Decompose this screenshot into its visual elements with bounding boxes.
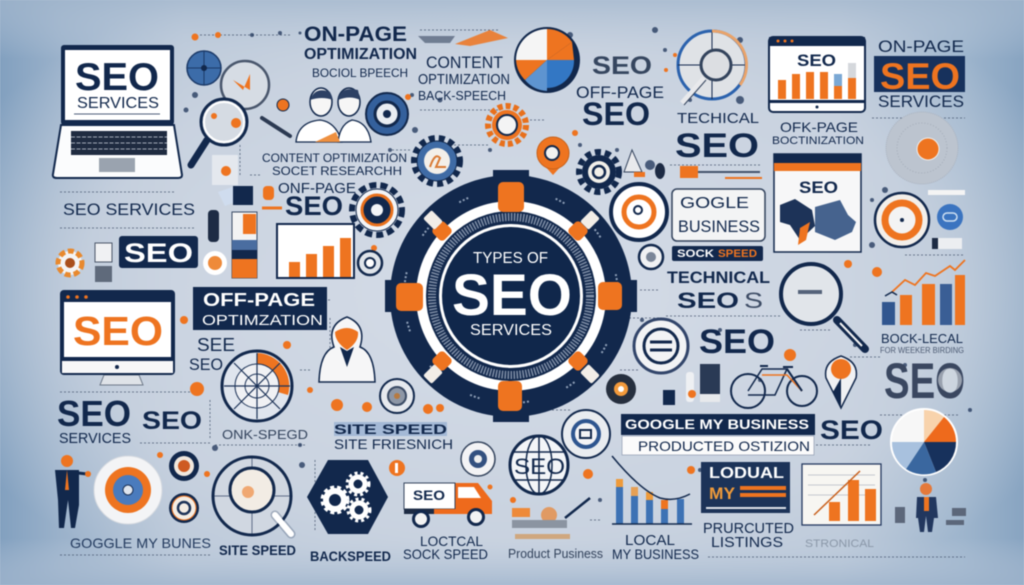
text: site speed [334,421,453,452]
chart: pie lower right [891,409,957,475]
heading: technical SEO S: TECHNICAL [667,268,770,287]
label: distorted SEO: SEO [884,353,965,409]
icon: business man right [916,483,938,532]
icon: SEO delivery truck: SEO [413,487,445,503]
chart: declining bars [612,456,692,524]
icon: dark orange ring [606,374,636,404]
captions lower left: SOCK SPEED [403,546,488,562]
heading: off-page SEO: SEO [592,52,652,80]
captions lower right [508,520,874,562]
icon: mesh circle [886,112,958,184]
text: off-page optimization: BOCTINIZATION [772,135,864,147]
laptop: SEO services [53,45,182,178]
captions lower right: Product Pusiness [508,546,603,561]
icon: tube [232,212,257,278]
central hub: types of SEO services [385,170,637,422]
heading: technical SEO: SEO [675,127,759,165]
captions lower right: MY BUSINESS [612,546,699,562]
icon: speed magnifier [213,457,291,535]
icon: wrench [262,118,290,136]
icon: big magnifier [781,264,865,349]
heading: technical SEO S [667,268,770,313]
icon: target pie [222,351,292,421]
label: SEO dark [119,236,198,268]
icon: globe SEO: SEO [514,454,565,479]
icon: small ring [358,251,382,275]
captions lower left: GOGGLE MY BUNES [70,535,211,551]
label: sock speed: SOCK [677,248,714,260]
text: content optimization, social research: SOCET RESEARCHH [272,164,402,178]
heading: on-page SEO: ONF-PAGE [278,180,356,197]
icon: bicycle [731,366,817,408]
icon: two people [296,88,371,142]
icon: small dark rect [663,390,675,405]
label: off-page optimization box [193,287,327,330]
captions lower left [70,533,488,564]
heading: on-page SEO [278,180,356,221]
laptop: SEO services: SEO [75,56,159,99]
heading: content optimization [418,53,510,103]
icon: large target [94,456,162,524]
text: site speed: SITE FRIESNICH [334,436,453,452]
heading: technical SEO: TECHICAL [677,110,759,127]
heading: technical SEO [675,110,759,165]
icon: small lens [639,245,663,269]
label: sock speed: SPEED [718,248,757,260]
icon: small orange gear [58,251,82,275]
heading: on-page SEO services: SERVICES [878,92,964,111]
heading: off-page SEO: OFF-PAGE [576,83,664,102]
icon: penguin figure [624,150,645,177]
hub label: TYPES OF [473,250,548,267]
icon: envelope and box [218,185,253,206]
icon: SEO delivery truck [404,483,492,526]
heading: content optimization: BACK-SPEECH [418,88,506,103]
chart: orange growth card [802,464,881,525]
text: see SEO [189,335,235,374]
heading: on-page optimization [304,23,417,80]
icon: orange pin [262,186,282,208]
icon: two small rings [169,451,199,523]
label: sock speed [672,246,763,261]
text: content optimization, social research [262,151,407,178]
heading: on-page SEO: SEO [285,191,343,221]
icon: device with pin [686,364,720,402]
hub label: SERVICES [470,322,552,339]
text: see SEO: SEE [197,335,235,355]
text: off-page optimization: OFK-PAGE [780,119,858,135]
icon: ring E [634,319,688,373]
label: off-page optimization box: OPTIMZATION [202,312,323,329]
captions lower right: PRURCUTED [703,520,794,537]
text: see SEO: SEO [189,355,223,374]
icon: blue badge [937,204,963,230]
chart: trend line with bars [882,260,965,325]
captions lower left: BACKSPEED [310,548,391,564]
icon: tool lamp [512,498,590,539]
heading: content optimization: OPTIMIZATION [418,71,510,88]
hub label: SEO [452,263,572,328]
icon: orange target ring [611,184,667,240]
heading: on-page optimization: OPTIMIZATION [304,46,417,63]
icon: white strip [928,190,965,195]
label: off-page optimization box: OFF-PAGE [203,290,315,310]
icon: orange dot [277,99,289,111]
icon: blue gear [414,138,460,184]
icon: browser with bars [769,37,865,112]
heading: technical SEO S: S [744,288,763,313]
text: site speed: SITE SPEED [334,421,447,437]
captions lower right: LOCAL [625,532,675,549]
icon: google my business banner [621,414,815,455]
heading: on-page SEO services: ON-PAGE [878,37,964,56]
icon: pin ring [461,442,495,476]
icon: orange wedge [418,30,508,46]
hub orange tabs [396,182,622,411]
icon: magnifier target [678,31,747,105]
icon: back magnifier [221,61,269,109]
icon: small lens dial [380,379,414,413]
heading: SEO lower right: SEO [820,415,883,445]
icon: orange pin marker [537,137,569,175]
icon: globe SEO [510,436,568,494]
icon: orange ring gear [352,185,402,235]
icon: orange ring [875,193,929,247]
heading: local text: FOR WEEKER BIRDING [880,346,964,355]
card: local my: MY [709,484,736,503]
icon: orange button [389,460,405,476]
text: content optimization, social research: CONTENT OPTIMIZATION [262,151,407,165]
card: local my [701,462,790,513]
icon: side tools [895,507,966,525]
text: SEO services: SEO SERVICES [63,200,195,219]
icon: blue ring [366,93,408,135]
heading: SEO services lower left [57,393,202,447]
heading: on-page optimization: ON-PAGE [304,23,407,46]
card: browser with puzzle map: SEO [799,178,838,197]
heading: local text: BOCK-LECAL [881,331,963,346]
icon: location pin [826,356,856,408]
icon: pie chart top [514,27,580,93]
heading: on-page SEO services [874,37,965,111]
captions lower left: SITE SPEED [219,542,296,558]
icon: dark pill [208,210,219,242]
icon: cable connector [655,163,762,179]
icon: orange gear [488,106,526,144]
heading: SEO mid right: SEO [699,323,775,361]
icon: business man left [55,455,91,528]
heading: SEO services lower left: SEO [57,393,131,434]
captions lower right: LISTINGS [711,534,783,551]
icon: desktop monitor [60,290,175,385]
laptop: SEO services: SERVICES [77,95,159,112]
text: off-page optimization [772,119,864,147]
heading: SEO services lower left: SERVICES [59,430,131,447]
icon: desktop monitor: SEO [73,308,163,354]
heading: off-page SEO: SEO [582,96,650,132]
captions lower right: STRONICAL [805,538,874,550]
icon: hooded person [319,317,375,382]
card: local my: LODUAL [709,465,784,482]
card: Google Business: GOGLE [680,195,749,212]
icon: browser with bars: SEO [797,51,836,70]
icon: hexagon gears [307,460,388,534]
icon: google my business banner: PRODUCTED OSTIZION [638,438,810,454]
heading: on-page SEO services: SEO [880,56,960,97]
card: browser with puzzle map [774,154,861,252]
heading: off-page SEO [576,52,664,132]
text: onk-speed: ONK-SPEGD [222,427,308,442]
label: SEO dark: SEO [124,238,193,268]
heading: on-page optimization: BOCIOL BPEECH [312,66,408,80]
heading: content optimization: CONTENT [426,53,503,72]
icon: google my business banner: GOOGLE MY BUSINESS [625,416,809,432]
captions lower left: LOCTCAL [420,533,483,549]
icon: orange plate [203,251,227,275]
icon: device [95,243,112,282]
chart: orange growth bars [277,224,354,278]
icon: document [212,155,238,185]
icon: ring C [562,410,610,458]
card: Google Business: BUSINESS [678,217,760,236]
icon: front magnifier [191,99,247,165]
heading: SEO services lower left: SEO [142,407,202,435]
heading: local text [880,331,964,355]
card: Google Business [672,189,765,241]
icon: blue compass [187,51,221,85]
icon: dark gear [579,152,619,192]
icon: tabs [932,238,962,249]
heading: technical SEO S: SEO [677,288,739,313]
